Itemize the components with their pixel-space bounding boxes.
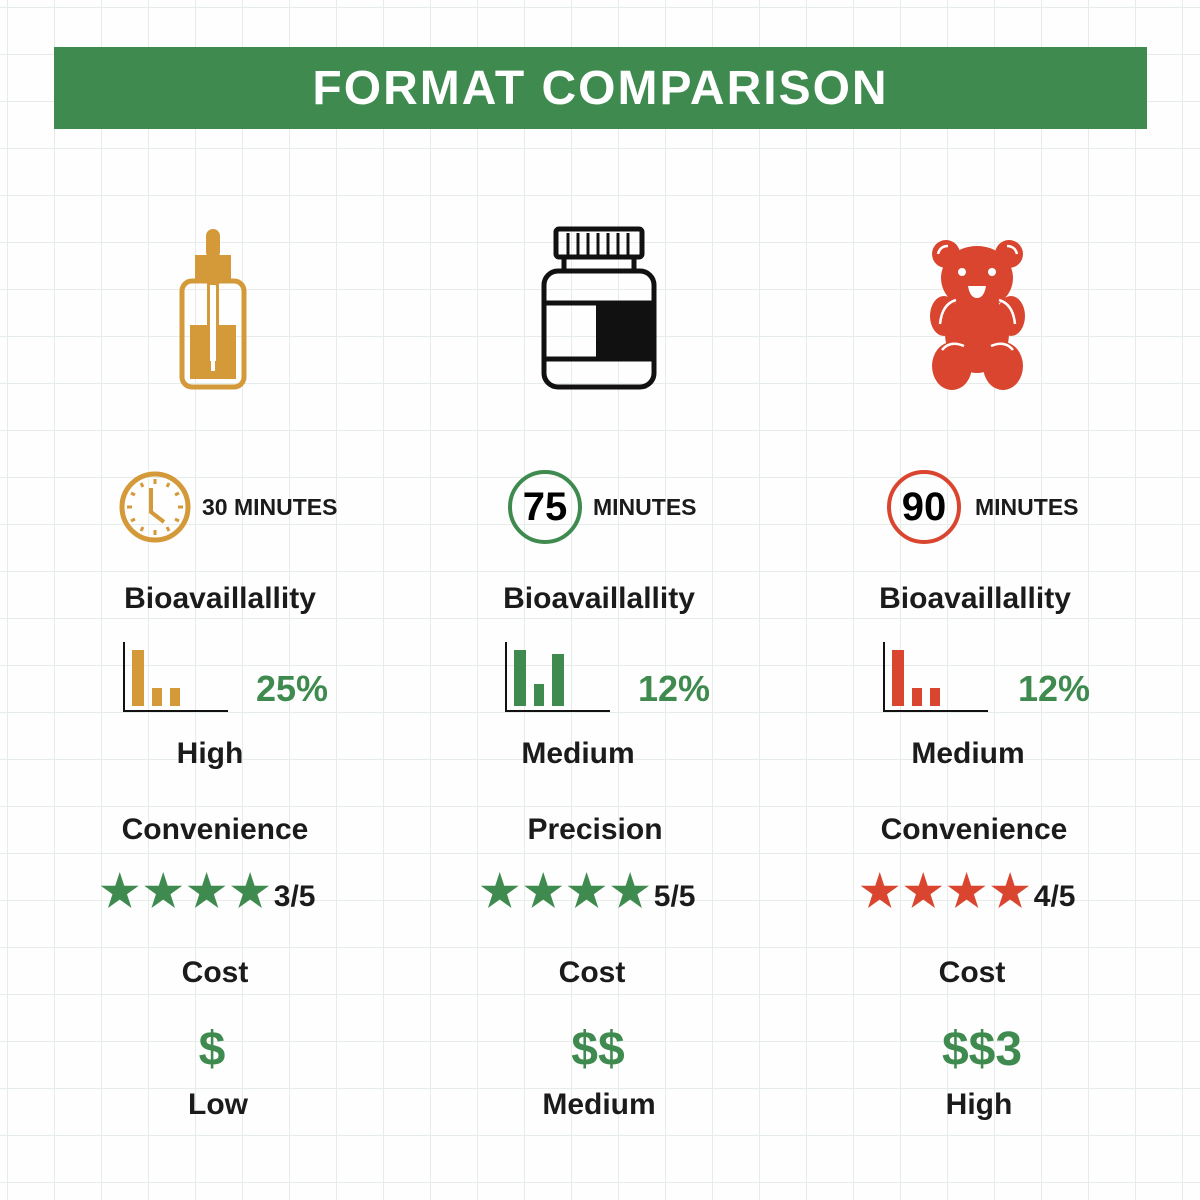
text: 25% [256,668,328,709]
text: Bioavaillallity [879,582,1071,615]
text: 12% [1018,668,1090,709]
text: Convenience [881,813,1067,846]
title banner [54,47,1147,129]
icon: clock [120,472,190,542]
column 3 time: 90 [902,485,946,529]
stars col2: ★★★★5/5 [480,867,696,916]
column 3 time [887,470,1078,544]
icon: dropper bottle [180,229,246,390]
text: $$3 [942,1023,1022,1076]
icon: pill bottle [542,226,656,390]
stars col1: ★★★★3/5 [100,867,316,916]
text: 12% [638,668,710,709]
column 3 time: MINUTES [975,494,1078,520]
bioavailability labels: Bioavaillallity [124,582,316,615]
text: Bioavaillallity [503,582,695,615]
text: Cost [559,956,625,989]
column 1 time [120,472,337,542]
text: Medium [542,1088,656,1121]
levels: High [177,737,243,770]
cost levels: Low [188,1088,248,1121]
stars col3: ★★★★4/5 [860,867,1076,916]
column 2 time [508,470,696,544]
icon: gummy bear [930,240,1025,390]
text: Medium [521,737,635,770]
rating labels: Convenience [122,813,308,846]
title banner: FORMAT COMPARISON [312,62,889,115]
text: Cost [939,956,1005,989]
column 2 time: 75 [523,485,567,529]
text: $$ [571,1023,625,1076]
text: Medium [911,737,1025,770]
chart col3 [883,642,988,712]
text: Precision [527,813,663,846]
cost labels: Cost [182,956,248,989]
chart col2 [505,642,610,712]
text: High [946,1088,1012,1121]
chart col1 [123,642,228,712]
cost symbols: $ [199,1023,225,1076]
column 2 time: MINUTES [593,494,696,520]
column 1 time: 30 MINUTES [202,494,337,520]
